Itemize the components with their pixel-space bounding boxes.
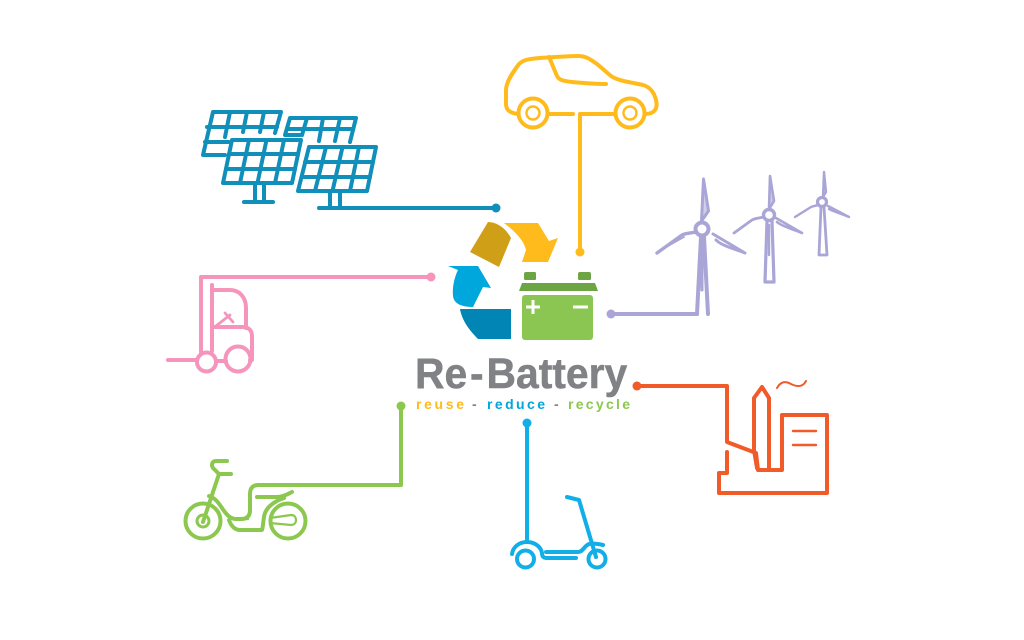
icon: forklift with connector: [168, 272, 436, 372]
recycling arrow: gold segment: [470, 222, 511, 267]
battery terminals: [524, 272, 591, 280]
tagline: recycle: [568, 396, 630, 412]
title: Re-Battery: [415, 349, 628, 397]
tagline: -: [554, 396, 559, 412]
recycling arrow: light blue: [448, 266, 491, 307]
recycling arrow: dark blue segment: [460, 309, 511, 339]
large turbine: [657, 179, 745, 314]
icon: recycling arrows and battery: [448, 222, 598, 340]
icon: factory with connector: [632, 381, 827, 493]
battery lid: [519, 283, 598, 291]
battery body: [522, 295, 593, 340]
icon: solar panels with connector: [203, 112, 500, 212]
icon: car with connector: [506, 56, 657, 256]
small turbine: [795, 172, 849, 255]
medium turbine: [734, 176, 802, 282]
recycling arrow: yellow: [504, 223, 558, 262]
tagline: reuse: [416, 396, 464, 412]
tagline: -: [472, 396, 477, 412]
battery plus and minus: [526, 300, 588, 314]
tagline: reduce: [487, 396, 545, 412]
icon: moped with connector: [186, 402, 406, 538]
icon: kick scooter with connector: [512, 418, 606, 568]
icon: wind turbines with connector: [606, 172, 849, 318]
tagline: [416, 396, 630, 412]
